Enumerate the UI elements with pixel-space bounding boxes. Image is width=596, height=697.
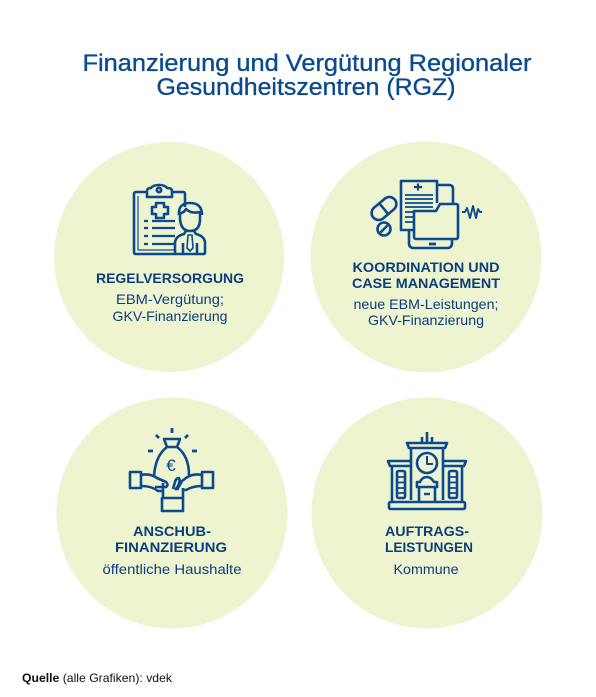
text: Regelversorgung financing: GKV-Finanzierung: [112, 308, 228, 324]
panel: Anschubfinanzierung: [56, 398, 288, 628]
heading: Anschubfinanzierung: ANSCHUB-: [133, 523, 211, 539]
icon detail: euro sign: €: [166, 456, 176, 475]
title: [82, 50, 532, 101]
panel: Regelversorgung: [54, 142, 284, 372]
text: Regelversorgung financing: EBM-Vergütung;: [116, 291, 224, 307]
heading: Auftragsleistungen: LEISTUNGEN: [385, 539, 473, 555]
icon: clipboard with doctor: [134, 185, 205, 254]
heading: Koordination und Case Management: [352, 259, 500, 291]
text: Auftragsleistungen financing: Kommune: [394, 561, 459, 577]
text: Regelversorgung financing: [112, 291, 228, 324]
heading: Koordination und Case Management: CASE MANAGEMENT: [352, 275, 500, 291]
title: Finanzierung und Vergütung Regionaler: [82, 50, 532, 77]
heading: Anschubfinanzierung: [115, 523, 227, 555]
heading: Auftragsleistungen: AUFTRAGS-: [385, 523, 469, 539]
icon: documents, folder, pills: [369, 181, 482, 248]
heading: Anschubfinanzierung: FINANZIERUNG: [115, 539, 227, 555]
source note: Quelle (alle Grafiken): vdek: [22, 671, 173, 685]
panel: Koordination und Case Management: [310, 142, 542, 372]
heading: Regelversorgung: REGELVERSORGUNG: [96, 270, 244, 286]
title: Gesundheitszentren (RGZ): [156, 74, 456, 101]
heading: Koordination und Case Management: KOORDINATION UND: [352, 259, 500, 275]
heading: Auftragsleistungen: [385, 523, 473, 555]
icon: town hall: [388, 432, 466, 509]
text: Koordination financing: GKV-Finanzierung: [368, 312, 484, 328]
text: Anschub financing: öffentliche Haushalte: [102, 561, 242, 577]
text: Koordination financing: neue EBM-Leistungen;: [354, 296, 498, 312]
panel: Auftragsleistungen: [312, 398, 542, 628]
icon: money bag held by hands: [130, 428, 213, 511]
text: Koordination financing: [354, 296, 498, 328]
